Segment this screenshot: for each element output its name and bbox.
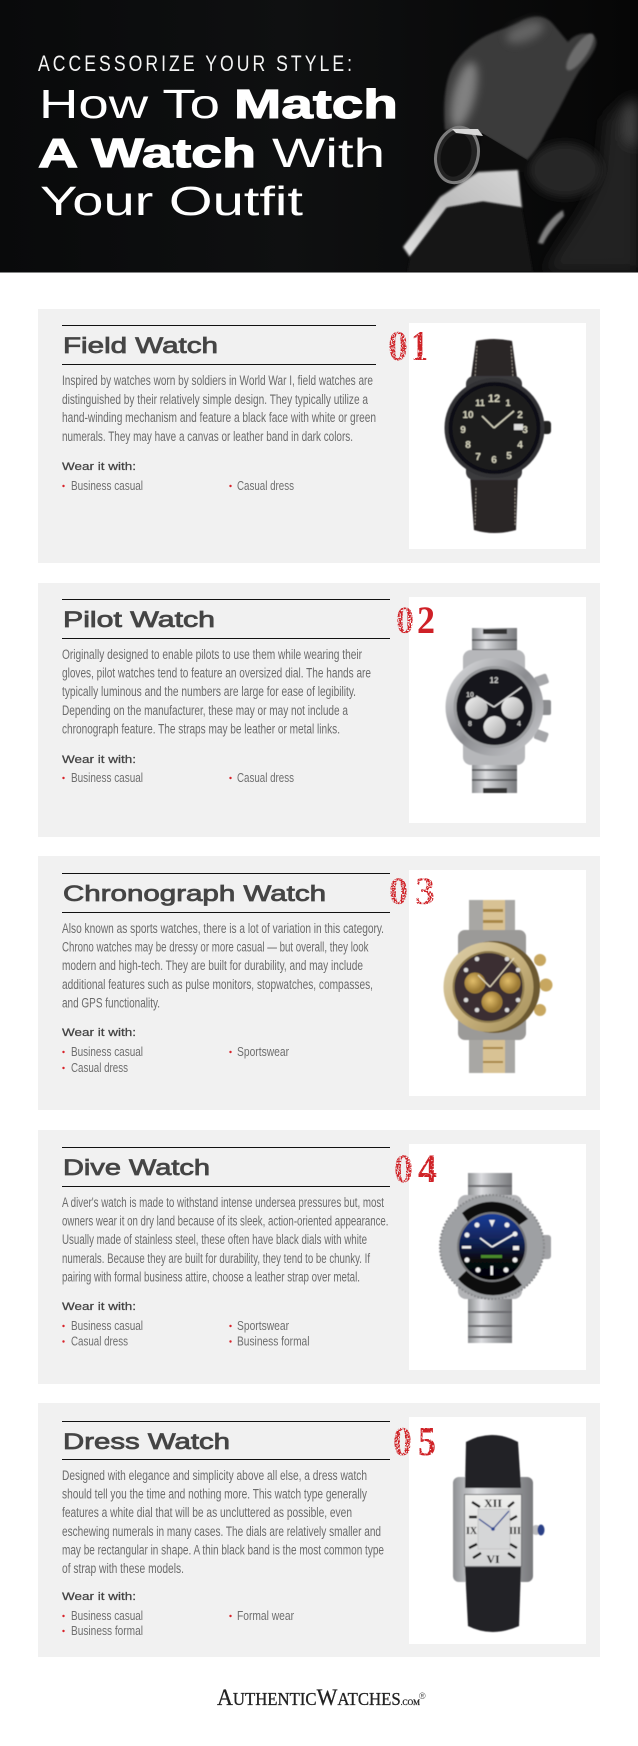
description: Originally designed to enable pilots to use them while wearing their bbox=[62, 647, 362, 662]
description bbox=[62, 921, 384, 1010]
description: modern and high-tech. They are built for durability, and may include bbox=[62, 958, 363, 973]
outfit list: Casual dress bbox=[237, 478, 294, 493]
outfit list: Business formal bbox=[237, 1334, 310, 1348]
description: Also known as sports watches, there is a lot of variation in this category. bbox=[62, 921, 384, 936]
description bbox=[62, 373, 376, 444]
wear it with heading: Wear it with: bbox=[62, 754, 136, 766]
outfit list bbox=[62, 770, 294, 785]
watch: field: 10 bbox=[462, 410, 474, 421]
image card bbox=[409, 870, 586, 1096]
watch: dress: III bbox=[509, 1526, 521, 1537]
description: may be rectangular in shape. A thin black band is the most common type bbox=[62, 1542, 384, 1557]
number 02: 2 bbox=[417, 599, 435, 642]
description: A diver's watch is made to withstand intense undersea pressures but, most bbox=[62, 1195, 384, 1210]
panel: field watch bbox=[38, 309, 600, 563]
watch: field: 11 bbox=[475, 398, 485, 408]
heading: Dive Watch bbox=[63, 1155, 210, 1180]
description: Chrono watches may be dressy or more casual — but overall, they look bbox=[62, 940, 369, 955]
main title: How To bbox=[39, 81, 220, 127]
watch: pilot bbox=[446, 628, 551, 793]
outfit list: Casual dress bbox=[237, 770, 294, 785]
panel: chronograph watch bbox=[38, 856, 600, 1110]
panel background bbox=[38, 309, 600, 563]
panel background bbox=[38, 1130, 600, 1384]
panel background bbox=[38, 856, 600, 1110]
watch: pilot: 12 bbox=[490, 676, 499, 685]
watch: field: 4 bbox=[517, 440, 523, 451]
number 01 bbox=[388, 324, 428, 370]
watch: field: 8 bbox=[465, 440, 471, 451]
number 03: 0 bbox=[389, 870, 408, 913]
number 04: 4 bbox=[418, 1146, 437, 1191]
watch: field: 2 bbox=[517, 410, 523, 421]
panel background bbox=[38, 583, 600, 837]
description: chronograph feature. The straps may be leather or metal links. bbox=[62, 721, 340, 736]
number 02: 0 bbox=[396, 599, 414, 642]
watch: pilot: 8 bbox=[468, 721, 472, 728]
number 02 bbox=[396, 599, 435, 642]
description: of strap with these models. bbox=[62, 1561, 184, 1576]
description: features a white dial that will be as uncluttered as possible, even bbox=[62, 1505, 352, 1520]
header eyebrow: ACCESSORIZE YOUR STYLE: bbox=[38, 52, 352, 77]
number 05 bbox=[393, 1418, 436, 1464]
description bbox=[62, 1468, 384, 1576]
image card bbox=[409, 1144, 586, 1370]
wear it with heading: Wear it with: bbox=[62, 1027, 136, 1039]
watch: field: 6 bbox=[491, 455, 497, 466]
number 01: 0 bbox=[388, 324, 408, 370]
heading: Chronograph Watch bbox=[63, 881, 326, 906]
watch: pilot: 4 bbox=[517, 721, 521, 728]
outfit list: Business casual bbox=[71, 1318, 143, 1333]
outfit list bbox=[62, 1044, 289, 1075]
outfit list: Business casual bbox=[71, 478, 143, 493]
watch: pilot: 10 bbox=[466, 692, 474, 699]
watch: field bbox=[444, 339, 551, 533]
header banner bbox=[0, 0, 638, 272]
description: and GPS functionality. bbox=[62, 995, 160, 1010]
description: Inspired by watches worn by soldiers in World War I, field watches are bbox=[62, 373, 373, 388]
description: Designed with elegance and simplicity above all else, a dress watch bbox=[62, 1468, 367, 1483]
registered mark: ® bbox=[419, 1691, 426, 1701]
main title bbox=[38, 81, 398, 224]
watch: dress: XII bbox=[484, 1496, 502, 1510]
description: pairing with formal business attire, choose a leather strap over metal. bbox=[62, 1269, 360, 1284]
outfit list: Casual dress bbox=[71, 1060, 128, 1075]
outfit list: Business formal bbox=[71, 1623, 143, 1638]
description: hand-winding mechanism and feature a black face with white or green bbox=[62, 410, 376, 425]
outfit list: Sportswear bbox=[237, 1044, 289, 1059]
watch: field: 1 bbox=[505, 398, 511, 408]
description bbox=[62, 647, 371, 736]
description: should tell you the time and nothing more. This watch type generally bbox=[62, 1487, 367, 1502]
heading: Pilot Watch bbox=[63, 607, 215, 632]
main title: Your Outfit bbox=[40, 178, 304, 224]
description: Usually made of stainless steel, these often have black dials with white bbox=[62, 1232, 367, 1247]
heading: Field Watch bbox=[63, 333, 218, 358]
outfit list: Business casual bbox=[71, 1608, 143, 1623]
image card bbox=[409, 597, 586, 823]
description: distinguished by their relatively simple design. They typically utilize a bbox=[62, 392, 368, 407]
panel: pilot watch bbox=[38, 583, 600, 837]
description: gloves, pilot watches tend to feature an oversized dial. The hands are bbox=[62, 666, 371, 681]
image card bbox=[409, 323, 586, 549]
outfit list: Business casual bbox=[71, 1044, 143, 1059]
panel: dress watch bbox=[38, 1403, 600, 1657]
outfit list: Formal wear bbox=[237, 1608, 294, 1623]
description: typically luminous and the numbers are large for ease of legibility. bbox=[62, 684, 356, 699]
watch: dress: VI bbox=[486, 1552, 500, 1566]
outfit list: Casual dress bbox=[71, 1334, 128, 1348]
number 04 bbox=[394, 1146, 437, 1191]
outfit list bbox=[62, 1318, 310, 1348]
panel background bbox=[38, 1403, 600, 1657]
wear it with heading: Wear it with: bbox=[62, 1591, 136, 1603]
main title: Match bbox=[234, 81, 398, 127]
watch: dress bbox=[453, 1435, 544, 1632]
outfit list: Business casual bbox=[71, 770, 143, 785]
description: numerals. They may have a canvas or leather band in dark colors. bbox=[62, 429, 353, 444]
number 05: 5 bbox=[418, 1418, 436, 1464]
description: additional features such as pulse monitors, stopwatches, compasses, bbox=[62, 977, 373, 992]
number 03: 3 bbox=[415, 870, 435, 913]
watch: field: 9 bbox=[460, 425, 466, 436]
heading: Dress Watch bbox=[63, 1429, 230, 1454]
outfit list: Sportswear bbox=[237, 1318, 289, 1333]
header photo: hand with wristwatch and suit cuff bbox=[403, 16, 638, 272]
footer logo: AUTHENTICWATCHES.COM bbox=[217, 1685, 420, 1710]
image card bbox=[409, 1417, 586, 1644]
watch: dive bbox=[440, 1173, 551, 1343]
main title: With bbox=[272, 130, 385, 176]
watch: field: 3 bbox=[522, 425, 528, 436]
watch: field: 12 bbox=[488, 393, 500, 405]
number 05: 0 bbox=[393, 1418, 412, 1464]
wear it with heading: Wear it with: bbox=[62, 1301, 136, 1313]
number 03 bbox=[389, 870, 435, 913]
main title: A Watch bbox=[38, 130, 256, 176]
watch: field: 7 bbox=[475, 452, 481, 463]
description bbox=[62, 1195, 388, 1284]
outfit list bbox=[62, 1608, 294, 1638]
watch: dress: IX bbox=[466, 1526, 478, 1537]
description: numerals. Because they are built for durability, they tend to be chunky. If bbox=[62, 1251, 370, 1266]
number 01: 1 bbox=[411, 324, 428, 370]
banner background bbox=[0, 0, 638, 272]
wear it with heading: Wear it with: bbox=[62, 461, 136, 473]
description: Depending on the manufacturer, these may or may not include a bbox=[62, 703, 348, 718]
number 04: 0 bbox=[394, 1146, 413, 1191]
description: eschewing numerals in many cases. The dials are relatively smaller and bbox=[62, 1524, 381, 1539]
description: owners wear it on dry land because of its sleek, action-oriented appearance. bbox=[62, 1214, 388, 1229]
watch: chronograph bbox=[444, 900, 552, 1073]
outfit list bbox=[62, 478, 294, 493]
panel: dive watch bbox=[38, 1130, 600, 1384]
watch: field: 5 bbox=[506, 451, 512, 462]
